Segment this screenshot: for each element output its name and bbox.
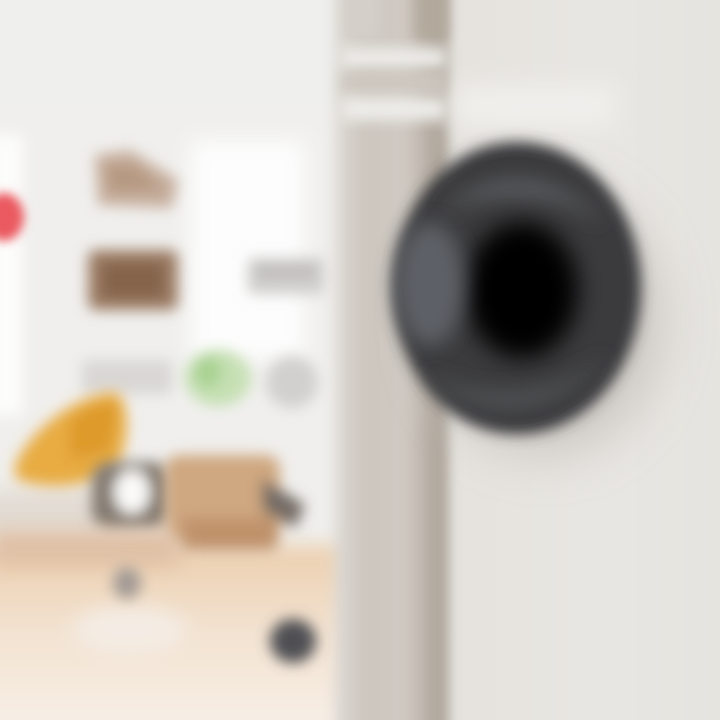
table stem	[113, 567, 141, 599]
knob grey lit side	[396, 222, 464, 346]
wall shelf item: grey left	[82, 360, 172, 394]
door knob	[393, 142, 641, 434]
door panel	[455, 0, 720, 720]
wall shelf item: green plant	[185, 350, 251, 406]
door frame	[335, 0, 453, 720]
icon: red wall object	[0, 193, 24, 241]
wall shelf item: brown box	[88, 250, 178, 310]
background: room wall	[0, 0, 350, 720]
orange chair	[15, 392, 127, 486]
tan sofa	[165, 455, 305, 550]
floor	[0, 545, 350, 720]
wall shelf item: grey right	[266, 356, 318, 408]
knob rose	[393, 142, 641, 434]
wall shelf item: upper brown	[95, 150, 178, 208]
floor reflection	[72, 606, 188, 654]
wall shelf item: grey box	[248, 258, 324, 294]
counter surface	[0, 490, 120, 540]
knob ring highlight	[440, 179, 605, 225]
dark floor object	[270, 619, 316, 663]
knob lower ring	[425, 350, 610, 409]
door knob shadow	[427, 185, 663, 455]
low table band	[0, 530, 180, 566]
dark chair frame	[92, 462, 170, 530]
knob centre	[466, 222, 578, 358]
